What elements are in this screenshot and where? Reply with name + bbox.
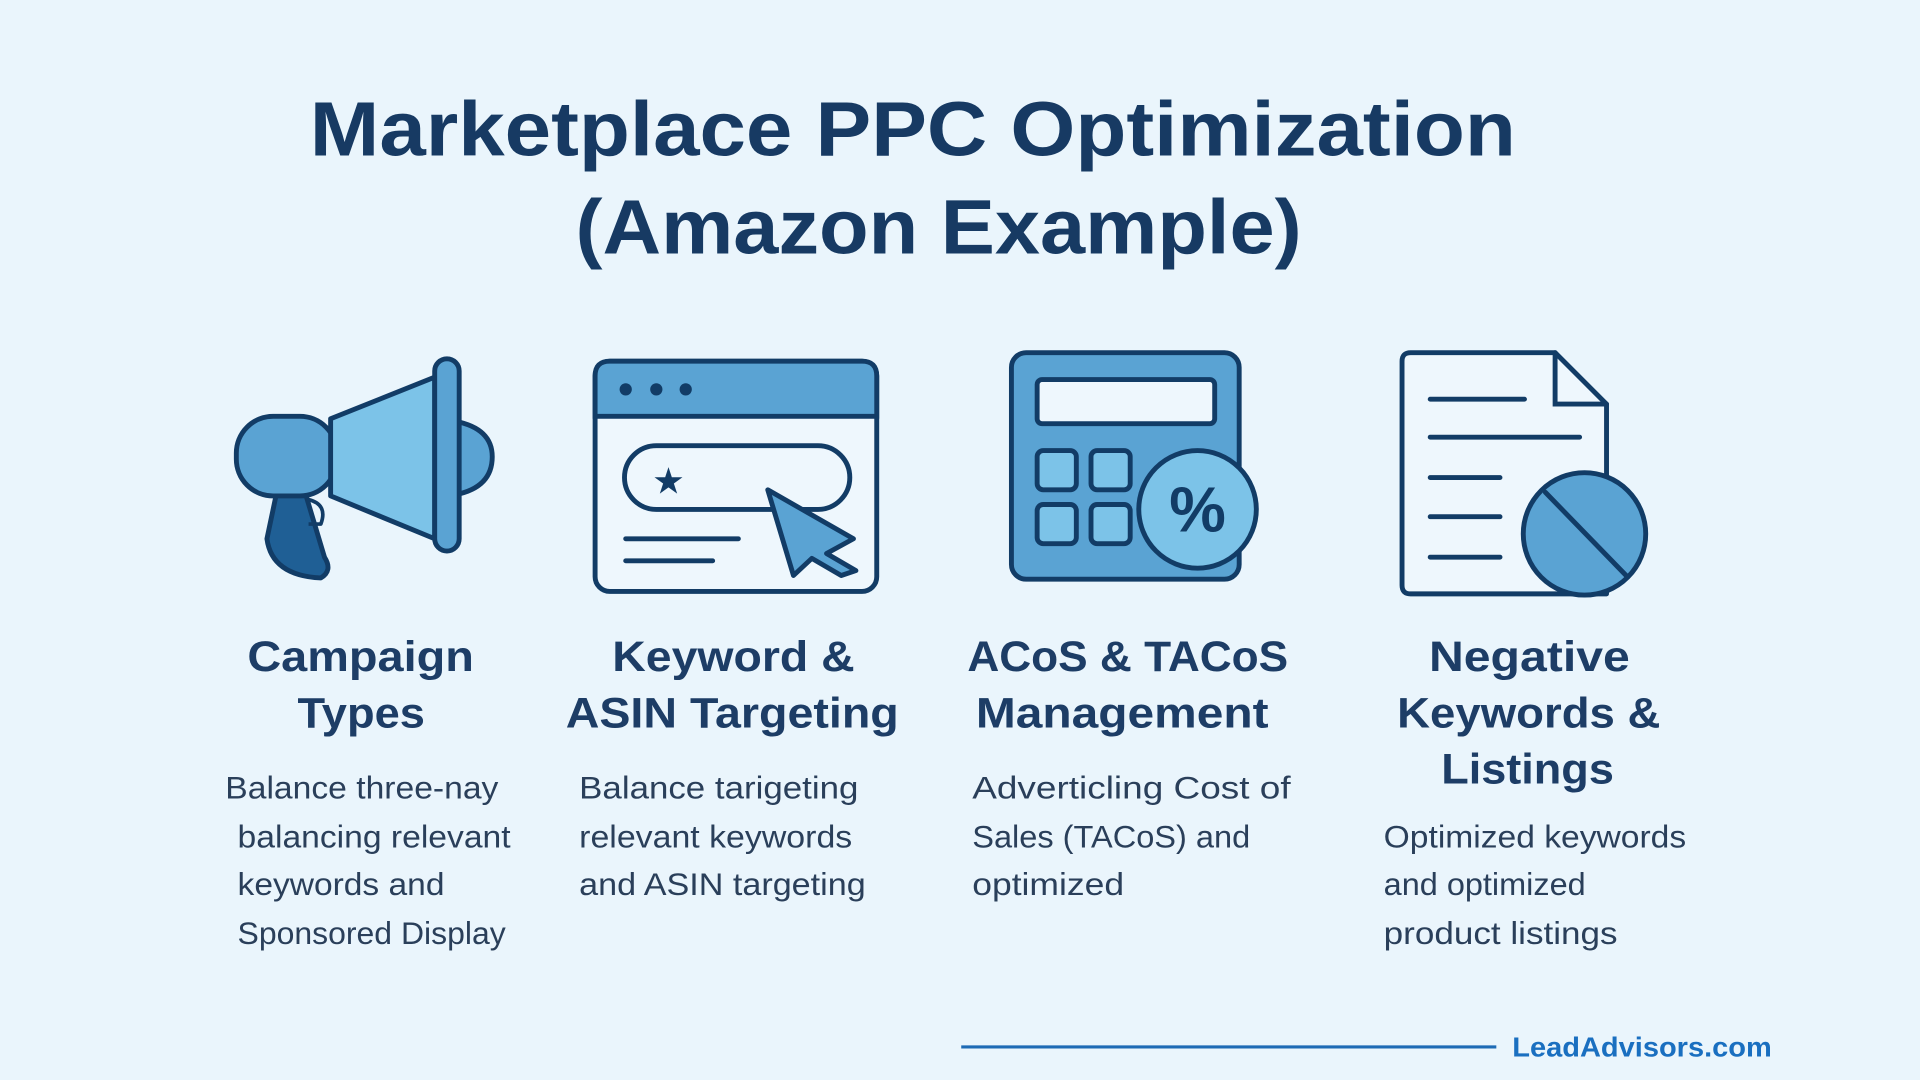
title: Marketplace PPC Optimization	[310, 87, 1516, 173]
icon: document with prohibition	[1402, 353, 1646, 595]
icon: browser with cursor	[595, 361, 877, 591]
column 2	[566, 633, 899, 902]
column 3: Management	[976, 689, 1269, 737]
icon: calculator with percent: %	[1169, 474, 1226, 545]
column 4: Negative	[1429, 633, 1630, 681]
title	[310, 87, 1516, 270]
column 4: product listings	[1384, 915, 1618, 951]
icon: calculator with percent	[1011, 353, 1256, 579]
icon: browser with cursor: ★	[652, 460, 685, 501]
column 1: Sponsored Display	[238, 915, 506, 951]
column 4: Optimized keywords	[1384, 818, 1686, 854]
column 3: ACoS & TACoS	[967, 633, 1288, 681]
column 1: Types	[298, 689, 425, 737]
column 3: optimized	[972, 866, 1124, 902]
column 1: balancing relevant	[238, 818, 511, 854]
column 1: Campaign	[247, 633, 474, 681]
column 1: keywords and	[238, 866, 444, 902]
column 2: relevant keywords	[579, 818, 852, 854]
column 4: and optimized	[1384, 866, 1586, 902]
column 4	[1384, 633, 1686, 951]
column 3	[967, 633, 1291, 902]
column 4: Listings	[1441, 746, 1614, 794]
column 1	[225, 633, 511, 951]
column 4: Keywords &	[1397, 689, 1660, 737]
title: (Amazon Example)	[576, 184, 1302, 270]
column 2: Balance tarigeting	[579, 769, 858, 805]
column 2: ASIN Targeting	[566, 689, 899, 737]
icon: megaphone	[236, 359, 492, 578]
column 1: Balance three-nay	[225, 769, 498, 805]
column 2: and ASIN targeting	[579, 866, 866, 902]
column 3: Adverticling Cost of	[972, 769, 1291, 805]
column 2: Keyword &	[612, 633, 855, 681]
footer brand: LeadAdvisors.com	[1512, 1032, 1772, 1063]
column 3: Sales (TACoS) and	[972, 818, 1250, 854]
